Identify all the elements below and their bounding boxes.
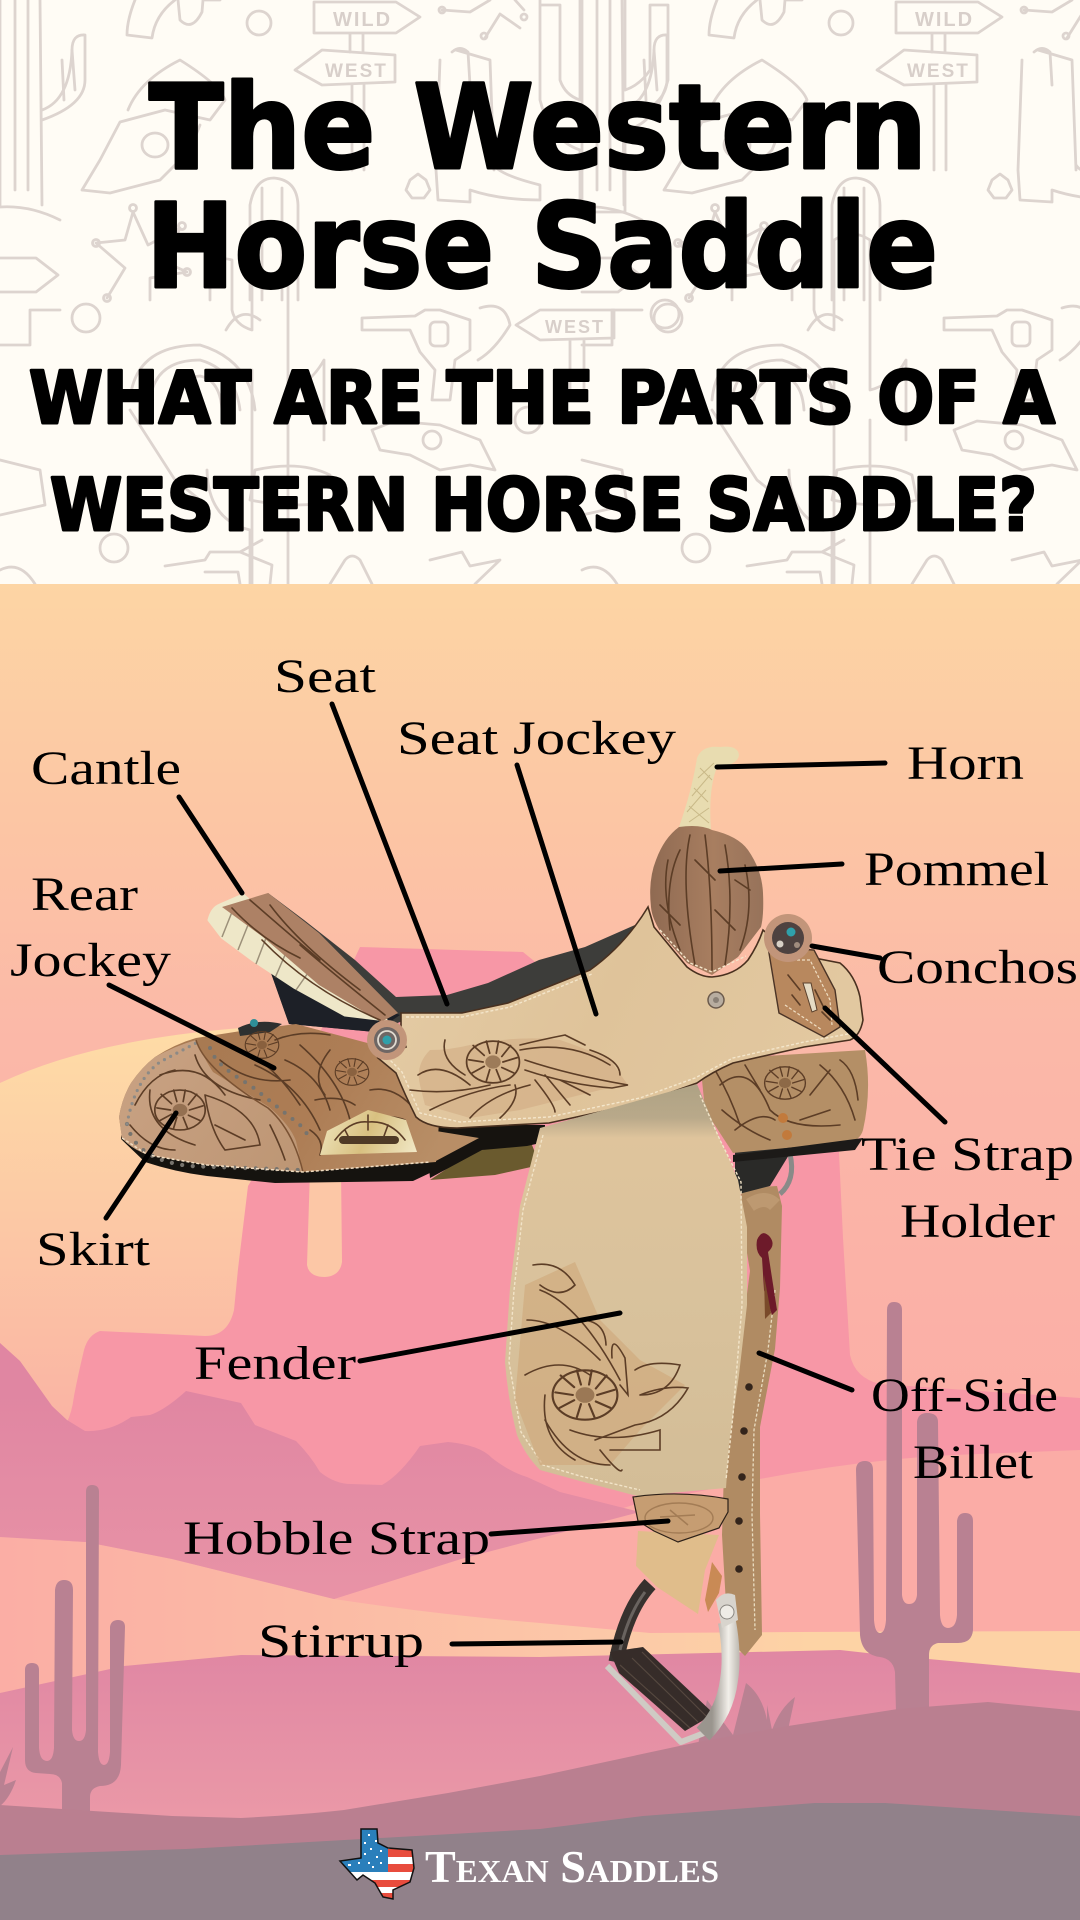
cactus: right <box>856 1302 973 1712</box>
jockey floral tooling <box>410 1035 628 1118</box>
seat jockey <box>378 907 863 1128</box>
skirt: off side <box>700 1050 868 1162</box>
part labels: Holder <box>900 1195 1055 1248</box>
logo wordmark: Texan Saddles <box>425 1842 719 1892</box>
grass tufts <box>0 1683 795 1806</box>
part labels: Billet <box>913 1436 1034 1489</box>
part labels: Rear <box>31 868 138 921</box>
part labels: Horn <box>907 737 1024 790</box>
part labels: Seat <box>274 650 377 703</box>
part labels: Cantle <box>31 742 181 795</box>
pommel <box>650 826 763 975</box>
part labels: Skirt <box>36 1223 151 1276</box>
part labels: Off-Side <box>871 1369 1058 1422</box>
part labels: Tie Strap <box>861 1128 1074 1181</box>
rear jockey shadow and wool underlay <box>425 1125 545 1180</box>
header background panel <box>0 0 1080 584</box>
skirt: near side <box>119 1019 440 1183</box>
hobble strap and stirrup leather <box>633 1494 728 1614</box>
title: Horse Saddle <box>146 178 938 315</box>
part labels: Seat Jockey <box>397 712 676 765</box>
cactus: left <box>25 1485 125 1812</box>
seat dark <box>268 893 640 1032</box>
part labels <box>10 650 1078 1668</box>
part labels: Conchos <box>877 941 1078 994</box>
cantle <box>209 893 398 1022</box>
part labels: Pommel <box>864 843 1049 896</box>
leader lines <box>106 704 945 1644</box>
icon: Texas flag logo <box>338 1828 415 1900</box>
western doodle pattern <box>0 0 1080 600</box>
part labels: Stirrup <box>258 1615 424 1668</box>
part labels: Hobble Strap <box>183 1512 490 1565</box>
title: The Western <box>149 59 927 196</box>
part labels: Jockey <box>10 934 171 987</box>
title <box>146 59 938 315</box>
subtitle question <box>29 356 1055 547</box>
part labels: Fender <box>194 1337 356 1390</box>
cinch ring and under-tree <box>735 1145 795 1195</box>
horn <box>679 747 739 830</box>
conchos <box>367 914 812 1060</box>
gold buckle plate <box>320 1110 417 1155</box>
billet <box>722 1186 782 1656</box>
sunset desert scene <box>0 584 1080 1920</box>
stirrup <box>607 1584 738 1742</box>
western saddle illustration <box>119 747 868 1742</box>
fender <box>505 1084 747 1496</box>
tie strap holder <box>768 947 840 1037</box>
